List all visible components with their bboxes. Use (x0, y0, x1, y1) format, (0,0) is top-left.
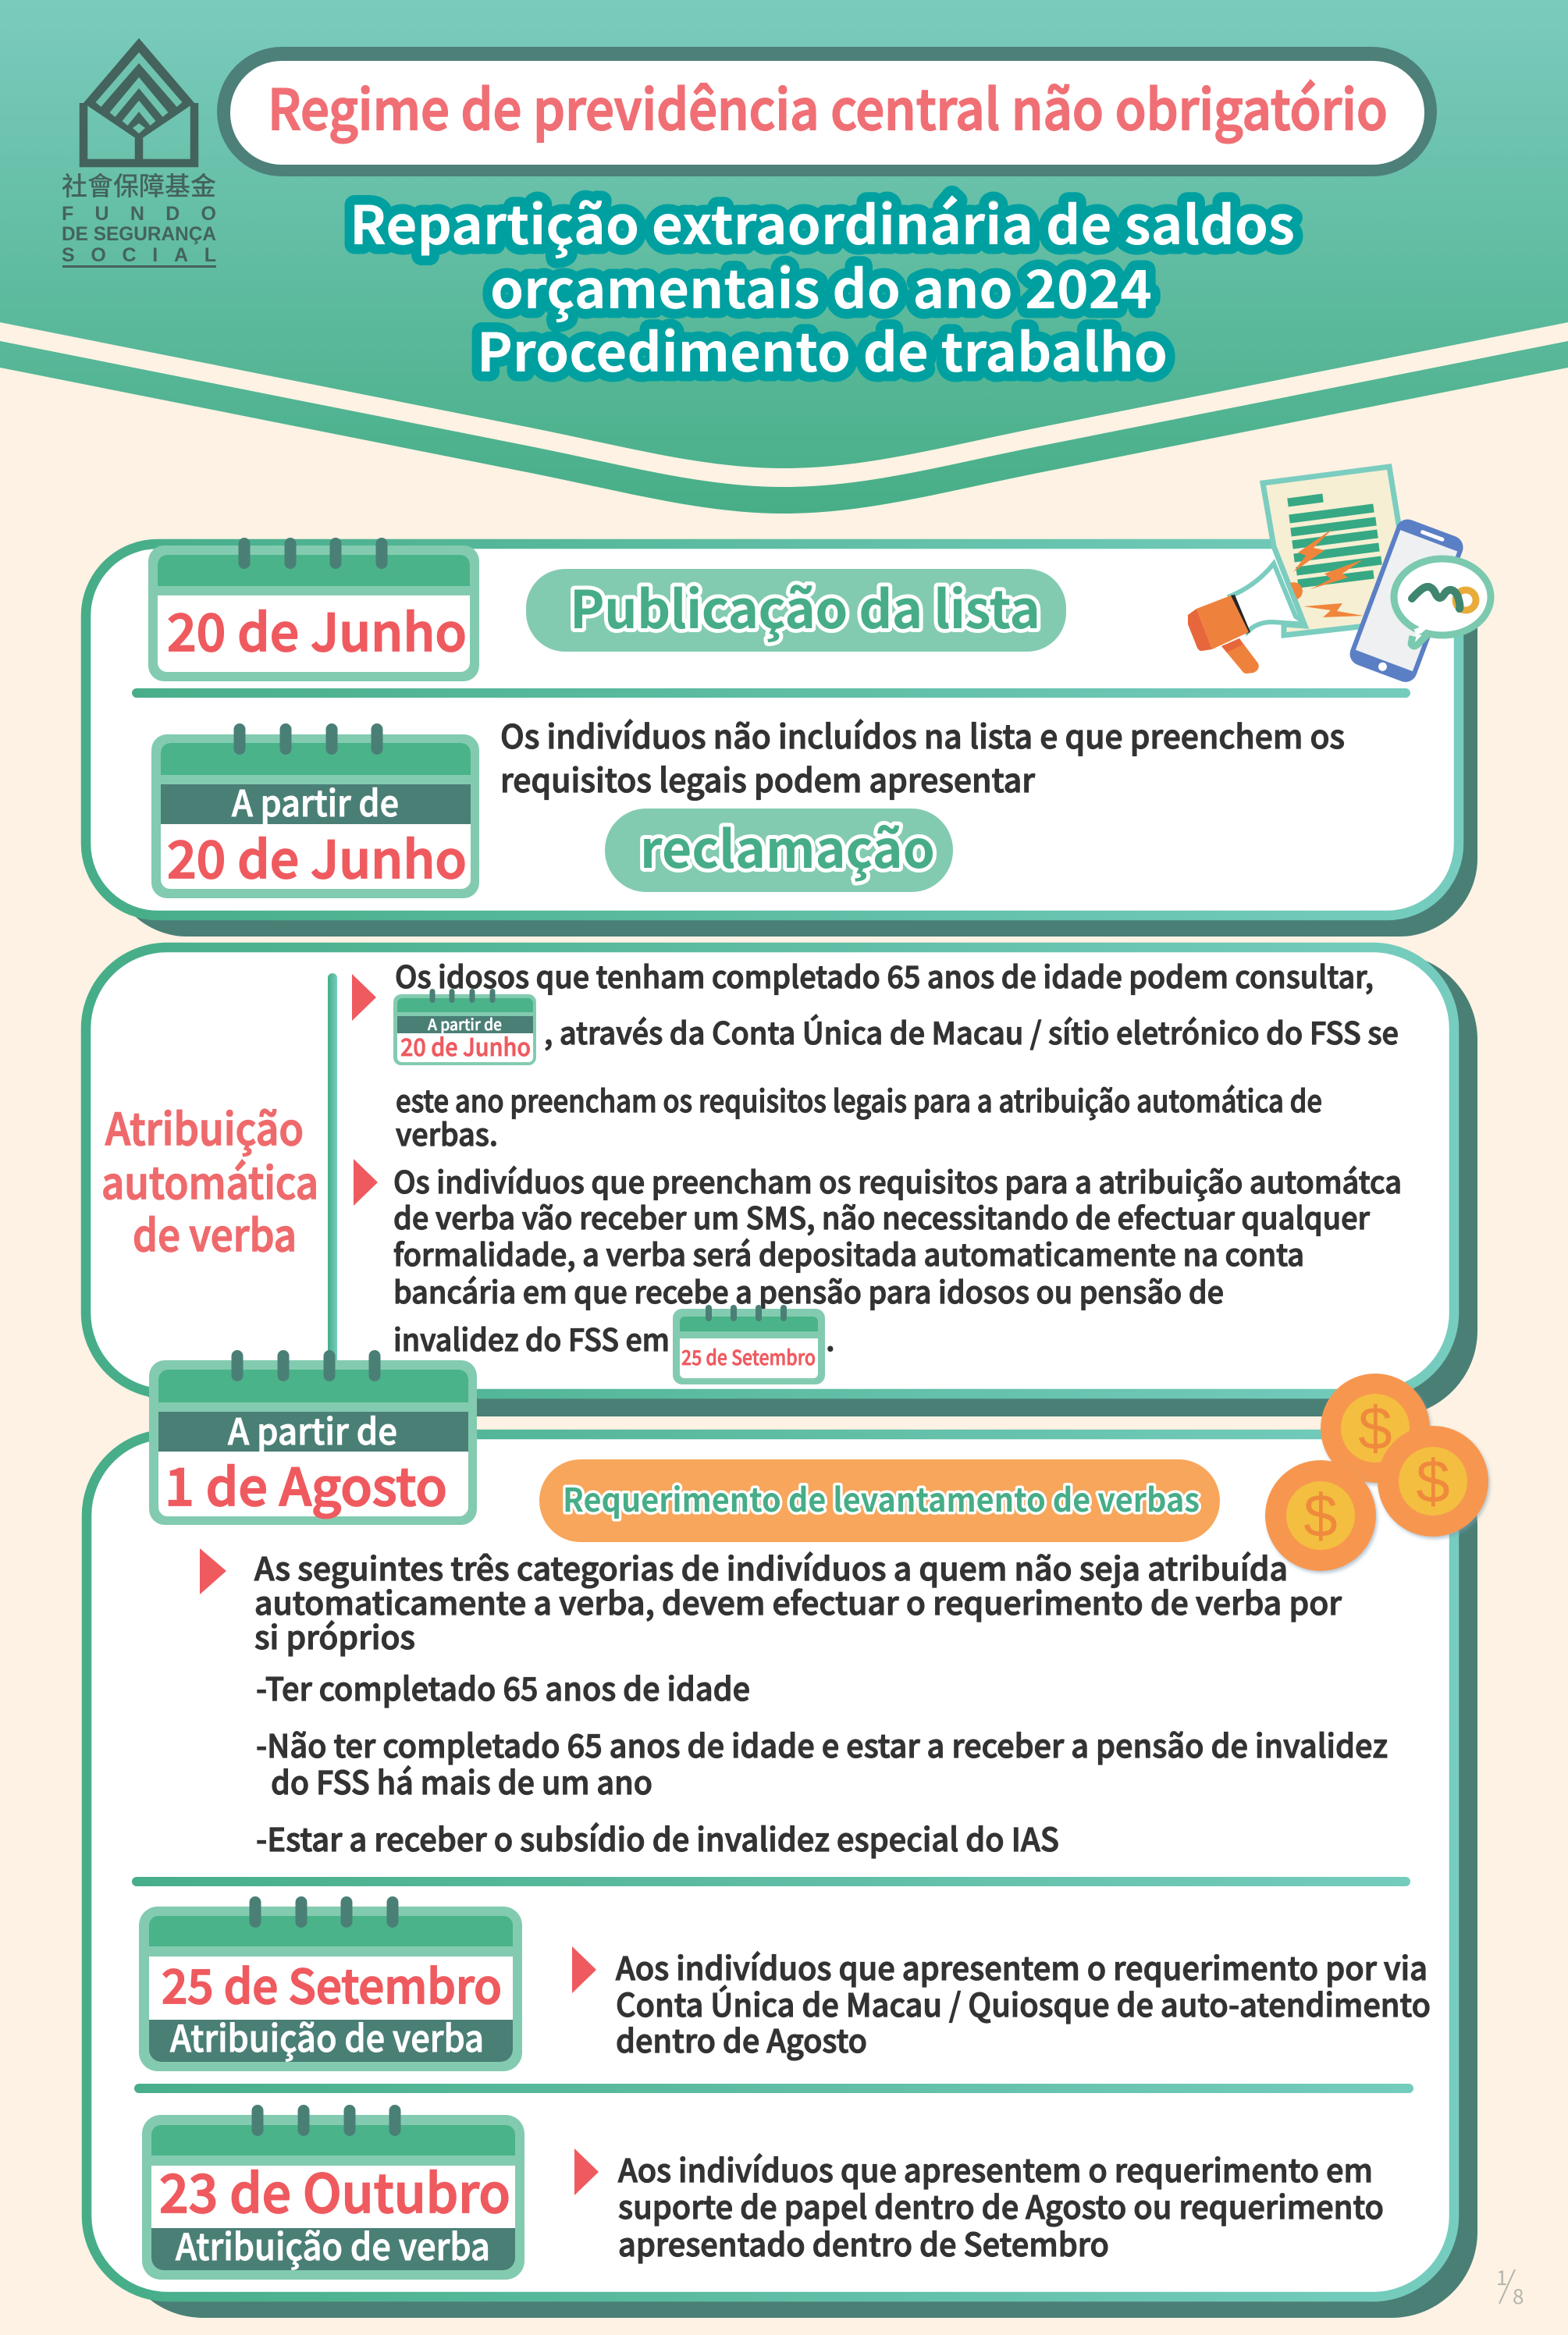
text: atribuição 23 de Outubro: suporte de papel dentro de Agosto ou requerimento (618, 2181, 1384, 2228)
pill: Publicação da lista: Publicação da lista (570, 568, 1040, 644)
page number: 1 (1496, 2262, 1507, 2291)
calendar: 23 de Outubro: Atribuição de verba (176, 2217, 490, 2271)
arrow (574, 2148, 599, 2195)
mini calendar: A partir de 20 de Junho: A partir de (428, 1012, 502, 1035)
text: SMS e depósito: Os indivíduos que preencham os requisitos para a atribuição automátca (393, 1159, 1402, 1203)
text: reclamação intro (500, 711, 1345, 802)
text: atribuição 25 de Setembro: Conta Única de Macau / Quiosque de auto-atendimento (616, 1979, 1431, 2026)
page number (1496, 2262, 1524, 2310)
main title: Procedimento de trabalho (477, 310, 1168, 387)
heading pill: Regime de previdência (217, 47, 1437, 176)
text: atribuição 23 de Outubro: Aos indivíduos que apresentem o requerimento em (618, 2145, 1373, 2191)
icon: coins (1265, 1374, 1488, 1571)
text: categorias de requerentes: do FSS há mais de um ano (271, 1757, 652, 1804)
main title (350, 183, 1295, 387)
mini calendar: A partir de 20 de Junho: 20 de Junho (400, 1028, 531, 1063)
logo: Fundo de Segurança Social: DE SEGURANÇA (62, 223, 216, 245)
main title: orçamentais do ano 2024 (490, 247, 1152, 324)
calendar: 20 de Junho: 20 de Junho (167, 592, 467, 666)
text: atribuição 23 de Outubro (618, 2145, 1384, 2266)
divider (132, 1877, 1410, 1886)
calendar: A partir de 1 de Agosto: 1 de Agosto (165, 1446, 447, 1521)
pill: Requerimento de levantamento de verbas (539, 1459, 1220, 1542)
page number: 8 (1513, 2281, 1524, 2310)
text: reclamação intro: requisitos legais podem apresentar (500, 755, 1036, 802)
pill: Requerimento de levantamento de verbas: Requerimento de levantamento de verbas (563, 1474, 1200, 1522)
heading: Atribuição automática de verba: de verba (133, 1201, 297, 1264)
calendar: 25 de Setembro (139, 1896, 522, 2071)
icon: megaphone, document and phone (1188, 467, 1491, 685)
text: categorias de requerentes: -Não ter completado 65 anos de idade e estar a receber a pensão de invalidez (256, 1720, 1388, 1767)
text: SMS e depósito: . (826, 1317, 835, 1360)
text: consulta: Os idosos que tenham completado 65 anos de idade podem consultar, (395, 954, 1374, 997)
text: categorias de requerentes: As seguintes três categorias de indivíduos a quem não seja atribuída (254, 1543, 1288, 1590)
heading pill: Regime de previdência: Regime de previdência central não obrigatório (268, 66, 1388, 146)
text: SMS e depósito: de verba vão receber um SMS, não necessitando de efectuar qualquer (393, 1195, 1371, 1239)
calendar: A partir de 1 de Agosto: A partir de (228, 1404, 397, 1455)
text: reclamação intro: Os indivíduos não incluídos na lista e que preenchem os (500, 711, 1345, 759)
text: SMS e depósito (393, 1159, 1402, 1360)
header banner (0, 0, 1568, 514)
text: consulta: verbas. (396, 1111, 498, 1155)
calendar: 23 de Outubro (142, 2105, 524, 2280)
main title: Repartição extraordinária de saldos (350, 183, 1295, 260)
calendar: 25 de Setembro: 25 de Setembro (162, 1949, 502, 2017)
logo: Fundo de Segurança Social (62, 38, 216, 268)
calendar: 20 de Junho (148, 538, 479, 681)
text: categorias de requerentes: -Ter completado 65 anos de idade (256, 1663, 750, 1710)
heading: Atribuição automática de verba: Atribuição (105, 1095, 304, 1158)
mini calendar: 25 de Setembro: 25 de Setembro (681, 1342, 816, 1371)
mini calendar: A partir de 20 de Junho (393, 989, 536, 1065)
text: categorias de requerentes: si próprios (254, 1612, 415, 1658)
text: atribuição 25 de Setembro: Aos indivíduos que apresentem o requerimento por via (616, 1942, 1428, 1989)
heading: Atribuição automática de verba: automática (101, 1149, 318, 1212)
panel: publicação da lista (86, 538, 1477, 936)
text: consulta (395, 954, 1399, 1155)
logo: Fundo de Segurança Social: FUNDO (62, 203, 216, 225)
calendar: A partir de 20 de Junho: 20 de Junho (167, 819, 467, 894)
text: atribuição 25 de Setembro: dentro de Agosto (616, 2015, 867, 2062)
icon: coins: $ (1303, 1481, 1338, 1550)
text: atribuição 23 de Outubro: apresentado dentro de Setembro (618, 2219, 1109, 2266)
pill: reclamação: reclamação (640, 809, 935, 883)
icon: coins: $ (1416, 1447, 1450, 1516)
heading: Atribuição automática de verba (101, 1095, 318, 1264)
arrow (572, 1946, 596, 1993)
calendar: A partir de 20 de Junho: A partir de (232, 776, 399, 827)
divider (134, 2084, 1413, 2093)
logo: Fundo de Segurança Social: 社會保障基金 (62, 165, 216, 203)
calendar: 23 de Outubro: 23 de Outubro (159, 2151, 510, 2228)
calendar: 25 de Setembro: Atribuição de verba (170, 2009, 484, 2063)
calendar: A partir de 1 de Agosto (149, 1350, 477, 1525)
text: consulta: este ano preencham os requisitos legais para a atribuição automática de (396, 1078, 1322, 1121)
divider (132, 688, 1410, 698)
text: categorias de requerentes: -Estar a receber o subsídio de invalidez especial do IAS (256, 1814, 1059, 1861)
arrow (354, 1159, 378, 1206)
arrow (352, 974, 376, 1021)
panel: requerimento de levantamento de verbas (87, 1434, 1477, 2318)
calendar: A partir de 20 de Junho (151, 723, 479, 898)
text: SMS e depósito: bancária em que recebe a pensão para idosos ou pensão de (393, 1269, 1224, 1313)
text: consulta: , através da Conta Única de Macau / sítio eletrónico do FSS se (544, 1010, 1399, 1054)
icon: coins: $ (1358, 1394, 1392, 1462)
text: categorias de requerentes: automaticamente a verba, devem efectuar o requerimento de verba por (254, 1577, 1342, 1624)
text: SMS e depósito: invalidez do FSS em (393, 1317, 670, 1360)
text: atribuição 25 de Setembro (616, 1942, 1431, 2062)
mini calendar: 25 de Setembro (673, 1305, 825, 1384)
text: SMS e depósito: formalidade, a verba será depositada automaticamente na conta (393, 1231, 1304, 1275)
vertical line (328, 973, 337, 1387)
arrow (200, 1548, 226, 1594)
logo: Fundo de Segurança Social: SOCIAL (62, 244, 216, 266)
text: categorias de requerentes (254, 1543, 1388, 1861)
panel: atribuição automática de verba (86, 947, 1477, 1416)
